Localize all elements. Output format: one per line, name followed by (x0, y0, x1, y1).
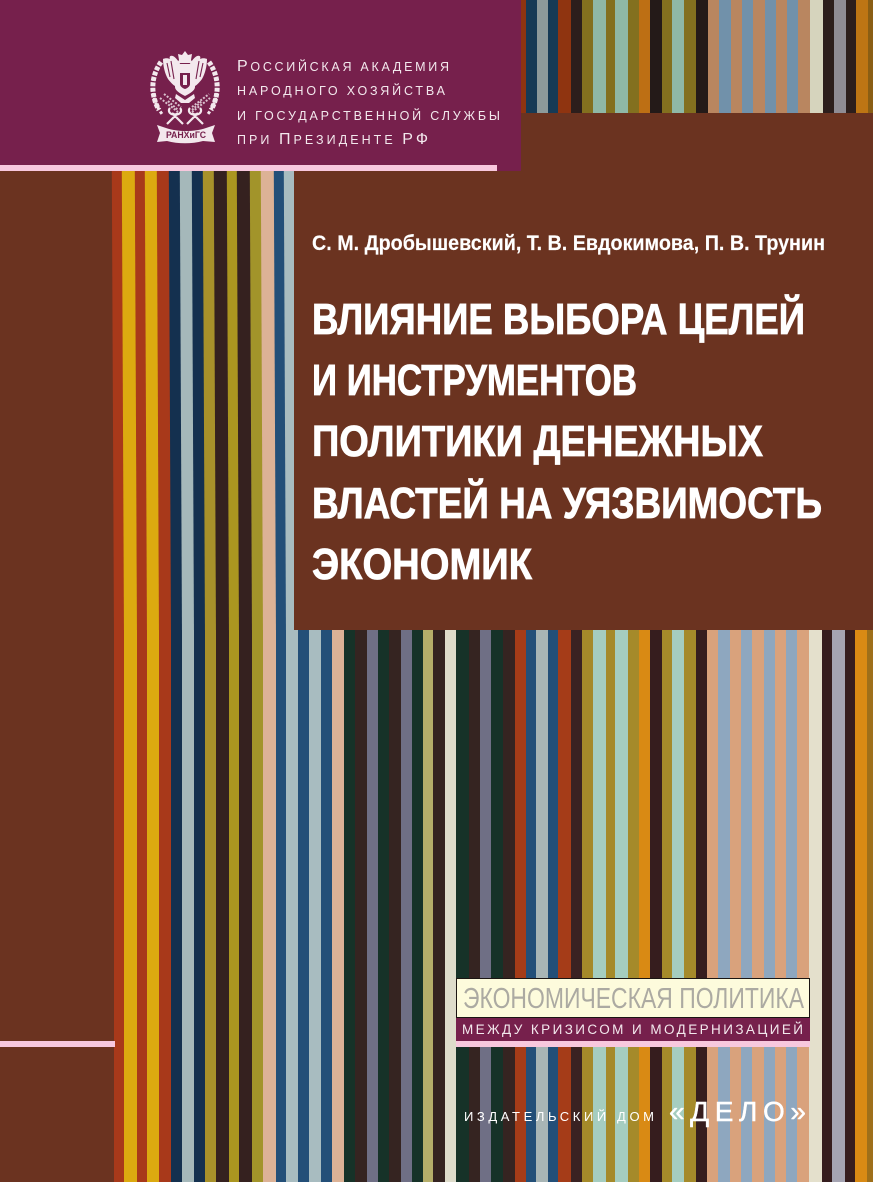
series pink rule (456, 1041, 810, 1047)
bay branches (160, 94, 210, 112)
academy name (237, 58, 500, 148)
header pink rule (0, 165, 497, 171)
feather lines (167, 61, 203, 79)
wreath left (153, 62, 161, 110)
publisher name: «ДЕЛО» (669, 1096, 806, 1127)
publisher label: ИЗДАТЕЛЬСКИЙ ДОМ (464, 1109, 654, 1124)
title line 5: ЭКОНОМИК (312, 540, 532, 589)
keys (167, 108, 203, 124)
ribbon lettering: РАНХиГС (166, 130, 206, 140)
header background (0, 0, 521, 171)
eagle tail (175, 94, 195, 103)
title line 3: ПОЛИТИКИ ДЕНЕЖНЫХ (312, 417, 763, 466)
eagle body and shield (175, 64, 195, 96)
painted stripes: left column (112, 165, 300, 630)
title (312, 293, 822, 589)
eagle right wing (188, 56, 207, 87)
authors: С. М. Дробышевский, Т. В. Евдокимова, П. В. Трунин (312, 232, 825, 255)
line 3: И ГОСУДАРСТВЕННОЙ СЛУЖБЫ (237, 108, 500, 123)
series subtitle: МЕЖДУ КРИЗИСОМ И МОДЕРНИЗАЦИЕЙ (462, 1022, 803, 1037)
line 2: НАРОДНОГО ХОЗЯЙСТВА (237, 83, 446, 98)
series label (456, 978, 810, 1047)
crown (177, 51, 193, 63)
painted stripes: top right strip (515, 0, 873, 113)
title line 2: И ИНСТРУМЕНТОВ (312, 356, 637, 405)
line 1: РОССИЙСКАЯ АКАДЕМИЯ (237, 58, 449, 75)
wreath right (209, 62, 217, 110)
eagle left wing (163, 56, 182, 87)
publisher (464, 1096, 806, 1127)
series name box (456, 978, 810, 1018)
icon: RANEPA emblem (153, 51, 217, 143)
panel: academy header (0, 0, 521, 171)
left pink rule (0, 1041, 115, 1047)
series subtitle band (456, 1018, 810, 1041)
painted stripes: lower field (114, 625, 873, 1182)
line 4: ПРИ ПРЕЗИДЕНТЕ РФ (237, 131, 428, 148)
shield detail (180, 73, 190, 89)
panel: title block (294, 113, 873, 630)
ribbon (157, 125, 215, 143)
